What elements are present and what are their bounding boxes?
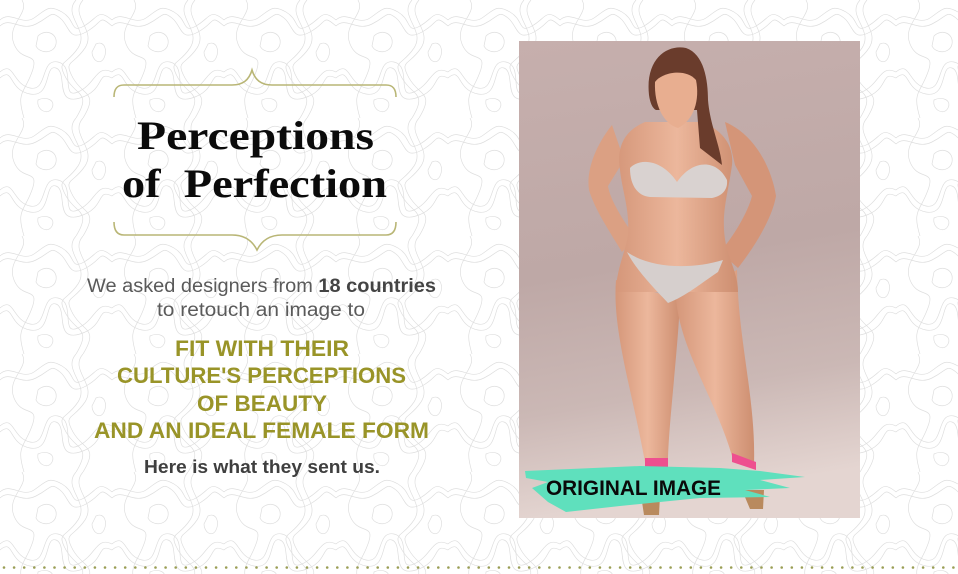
olive highlighted statement: CULTURE'S PERCEPTIONS (117, 363, 406, 388)
face and neck (655, 73, 697, 128)
ankle straps (645, 458, 668, 467)
dotted bottom border (4, 566, 958, 569)
heading block (114, 70, 396, 250)
title (122, 113, 387, 206)
lower garment (627, 252, 723, 303)
olive highlighted statement: FIT WITH THEIR (175, 336, 349, 361)
left leg (615, 280, 680, 462)
title: Perceptions (137, 113, 374, 158)
olive highlighted statement: AND AN IDEAL FEMALE FORM (94, 418, 429, 443)
feet (641, 495, 660, 515)
top garment (630, 162, 727, 198)
olive highlighted statement: OF BEAUTY (197, 391, 327, 416)
hair (649, 47, 722, 165)
brush label: ORIGINAL IMAGE (546, 477, 721, 500)
brush label (525, 466, 805, 512)
arms (588, 125, 636, 252)
right leg (676, 270, 754, 464)
olive highlighted statement (94, 336, 429, 443)
top ornamental bracket (114, 70, 396, 97)
bottom ornamental bracket (114, 222, 396, 250)
title: of Perfection (122, 161, 387, 206)
studio backdrop (519, 41, 860, 518)
closing line: Here is what they sent us. (144, 457, 380, 477)
intro text: We asked designers from 18 countries (87, 276, 436, 297)
stylised figure (588, 47, 776, 515)
intro text (87, 276, 436, 321)
intro text: to retouch an image to (157, 300, 365, 321)
photo panel: original image (519, 41, 860, 518)
torso (616, 122, 738, 292)
